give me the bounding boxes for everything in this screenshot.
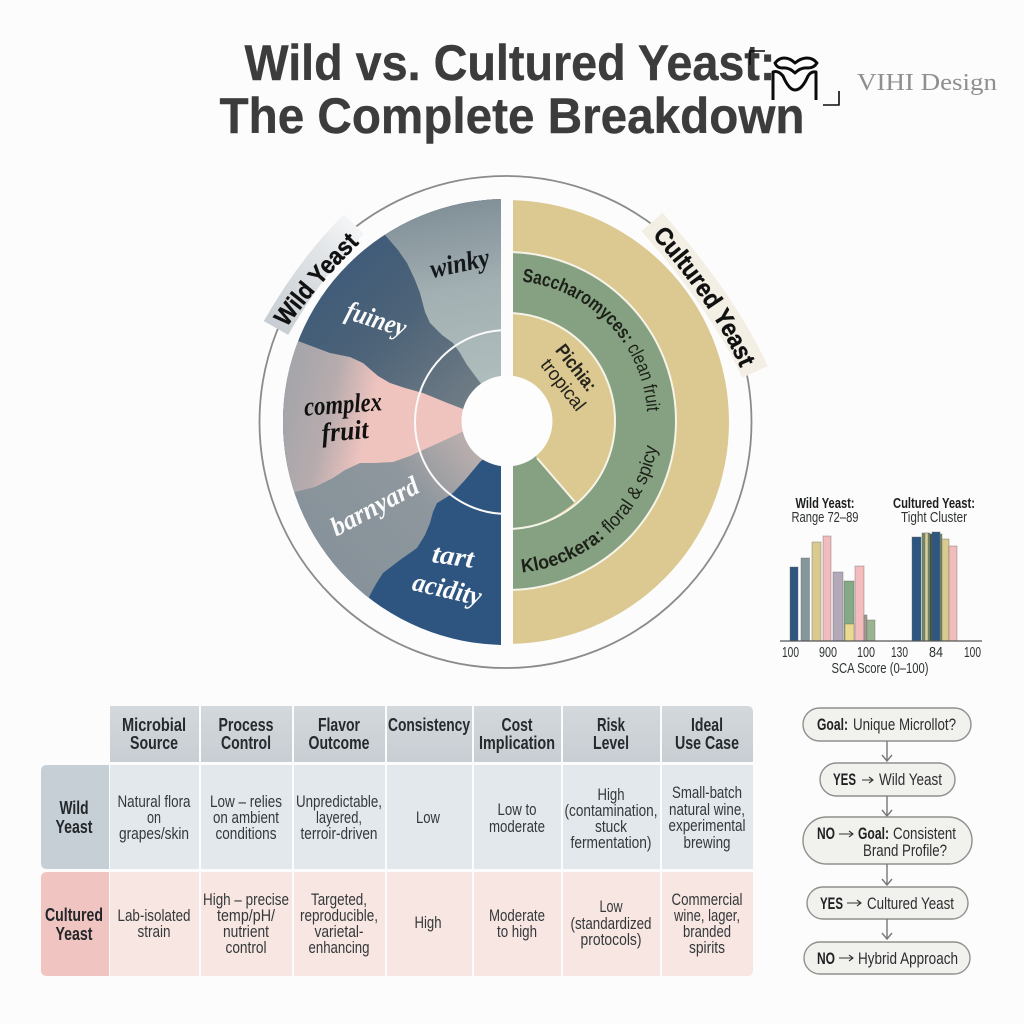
- cell: use case: spirits: [689, 939, 725, 957]
- title: The Complete Breakdown: [220, 88, 804, 144]
- segment: complex fruit: [283, 199, 496, 492]
- cell: flavor outcome: Targeted,: [311, 891, 367, 909]
- axis tick labels: [782, 645, 981, 661]
- chart heading: cultured yeast: [893, 496, 975, 526]
- chart heading: cultured yeast: Tight Cluster: [901, 510, 967, 526]
- cell: flavor outcome: terroir-driven: [300, 825, 378, 843]
- cell: process control: on ambient: [213, 809, 279, 827]
- flavor wheel: [258, 175, 768, 669]
- row head: Wild Yeast: Yeast: [56, 816, 92, 837]
- wheel label: Pichia tropical: tropical: [536, 355, 589, 415]
- flow node: yes cultured yeast: YES: [820, 894, 843, 913]
- header: Consistency: [387, 706, 472, 762]
- cell: use case: wine, lager,: [673, 907, 740, 925]
- flow node: unique microlot: Goal:: [817, 715, 848, 734]
- cell: risk: [563, 872, 660, 976]
- cell: microbial source: Natural flora: [118, 793, 191, 811]
- header: Cost Implication: Implication: [479, 732, 555, 753]
- cell: flavor outcome: layered,: [316, 809, 362, 827]
- row head: Cultured Yeast: [41, 872, 109, 976]
- axis tick labels: 100: [964, 645, 981, 661]
- wheel label: Kloeckera: Kloeckera: floral & spicy: [521, 445, 660, 572]
- table row: wild yeast: [41, 765, 753, 869]
- cell: use case: experimental: [668, 817, 746, 835]
- axis tick labels: 100: [782, 645, 799, 661]
- flow node: no hybrid approach: Hybrid Approach: [858, 949, 958, 968]
- row head: Wild Yeast: [41, 765, 109, 869]
- cell: risk: [563, 765, 660, 869]
- chart heading: cultured yeast: Cultured Yeast:: [893, 496, 975, 512]
- chart axis: [780, 640, 982, 642]
- cell: risk: fermentation): [570, 834, 652, 852]
- table row: cultured yeast: [41, 872, 753, 976]
- axis tick labels: 100: [857, 645, 875, 661]
- cell: cost: moderate: [489, 818, 545, 836]
- axis tick labels: 84: [929, 645, 943, 661]
- cell: microbial source: Lab-isolated: [118, 907, 190, 925]
- cell: process control: Low – relies: [210, 793, 282, 811]
- axis title: SCA Score (0–100): [832, 661, 928, 677]
- arrow: [882, 796, 892, 816]
- header: Microbial Source: Microbial: [122, 714, 186, 735]
- segment: winky: [385, 199, 501, 384]
- wheel label: complex fruit: [303, 386, 383, 448]
- cell: use case: Small-batch: [672, 784, 742, 802]
- header: Ideal Use Case: Ideal: [691, 714, 723, 735]
- arrow: [882, 919, 892, 939]
- bar chart: SCA score: [780, 496, 982, 677]
- inner ring line: [414, 329, 501, 515]
- panel: wild yeast half: [283, 199, 501, 645]
- header: Ideal Use Case: Use Case: [675, 732, 739, 753]
- header: Microbial Source: [110, 706, 199, 762]
- segment: inner tan: [513, 314, 614, 523]
- header: Process Control: [201, 706, 292, 762]
- title: [220, 35, 804, 144]
- header: Flavor Outcome: Outcome: [308, 732, 370, 753]
- flow node: no consistent brand profile: Consistent: [893, 824, 956, 843]
- cell: risk: (standardized: [570, 915, 652, 933]
- flow node: no hybrid approach: NO: [817, 949, 835, 968]
- flow node: no consistent brand profile: Goal:: [858, 824, 889, 843]
- axis tick labels: 130: [891, 645, 908, 661]
- segment: fuiney: [298, 199, 500, 409]
- cell: use case: branded: [683, 923, 731, 941]
- cultured yeast banner: Cultured Yeast: [655, 228, 754, 368]
- segment: inner green wedge: [513, 456, 575, 528]
- header: Flavor Outcome: [294, 706, 385, 762]
- wheel label: tart acidity: acidity: [410, 567, 486, 612]
- cell: process control: [201, 765, 292, 869]
- cell: microbial source: strain: [138, 923, 170, 941]
- cell: flavor outcome: enhancing: [308, 939, 370, 957]
- cell: consistency: [387, 872, 472, 976]
- segment: tart acidity: [283, 199, 501, 645]
- header: Flavor Outcome: Flavor: [318, 714, 360, 735]
- cell: risk: stuck: [595, 818, 628, 836]
- cell: consistency: Low: [416, 809, 440, 827]
- logo text: VIHI Design: [857, 70, 997, 96]
- logo: VIHI Design: [750, 51, 997, 105]
- flow node: yes wild yeast: YES: [833, 770, 856, 789]
- cell: use case: [662, 872, 753, 976]
- cell: consistency: High: [414, 914, 442, 932]
- chart heading: wild yeast: Range 72–89: [792, 510, 858, 526]
- wheel label: Saccharomyces: Saccharomyces: clean fruit: [523, 269, 660, 412]
- cell: microbial source: [110, 872, 199, 976]
- cell: microbial source: [110, 765, 199, 869]
- flow node: no consistent brand profile: NO: [817, 824, 835, 843]
- header: Consistency: Consistency: [388, 714, 471, 735]
- cell: use case: natural wine,: [669, 801, 745, 819]
- cell: microbial source: on: [147, 809, 161, 827]
- cell: flavor outcome: varietal-: [314, 923, 364, 941]
- arrow: [882, 864, 892, 885]
- flow node: yes cultured yeast: Cultured Yeast: [867, 894, 954, 913]
- cell: cost: Moderate: [489, 907, 545, 925]
- header: Process Control: Control: [221, 732, 271, 753]
- cell: cost: [474, 765, 561, 869]
- bars: cultured yeast: [912, 532, 957, 641]
- cell: flavor outcome: [294, 765, 385, 869]
- cell: flavor outcome: Unpredictable,: [296, 793, 382, 811]
- segment: outer tan ring: [513, 200, 729, 644]
- table header row: [110, 706, 753, 762]
- icon: logo mark: [750, 51, 839, 105]
- cell: risk: (contamination,: [564, 802, 658, 820]
- segment: green ring: [513, 251, 677, 591]
- wild yeast banner: Wild Yeast: [272, 233, 360, 325]
- wheel label: winky: winky: [427, 242, 493, 284]
- cell: use case: Commercial: [672, 891, 742, 909]
- row head: Cultured Yeast: Yeast: [56, 923, 92, 944]
- bars: wild yeast: [790, 536, 875, 641]
- header: Process Control: Process: [218, 714, 274, 735]
- cell: cost: to high: [497, 923, 537, 941]
- header: Cost Implication: Cost: [502, 714, 532, 735]
- decision flowchart: [803, 708, 972, 974]
- cell: process control: [201, 872, 292, 976]
- wheel label: barnyard: barnyard: [325, 470, 424, 542]
- wheel label: tart acidity: tart: [430, 538, 478, 574]
- header: Microbial Source: Source: [130, 732, 178, 753]
- axis tick labels: 900: [819, 645, 837, 661]
- wheel label: complex fruit: fruit: [320, 414, 371, 448]
- wheel label: fuiney: fuiney: [342, 295, 411, 343]
- header: Risk Level: [563, 706, 660, 762]
- cell: cost: Low to: [498, 801, 536, 819]
- outer ring: [260, 176, 752, 668]
- cell: process control: temp/pH/: [217, 907, 275, 925]
- cell: use case: brewing: [684, 834, 730, 852]
- flow node: unique microlot: Unique Microllot?: [853, 715, 956, 734]
- center hole: [462, 376, 552, 466]
- wheel label: complex fruit: complex: [303, 386, 383, 422]
- flow node: yes wild yeast: [820, 763, 955, 796]
- flow node: yes cultured yeast: [807, 887, 968, 919]
- cell: risk: High: [598, 786, 624, 804]
- header: Risk Level: Risk: [597, 714, 626, 735]
- comparison table: [41, 706, 753, 976]
- row head: Cultured Yeast: Cultured: [45, 904, 103, 925]
- cell: flavor outcome: [294, 872, 385, 976]
- header: Ideal Use Case: [662, 706, 753, 762]
- row head: Wild Yeast: Wild: [60, 797, 88, 818]
- cell: microbial source: grapes/skin: [119, 825, 189, 843]
- cell: process control: nutrient: [223, 923, 269, 941]
- cell: flavor outcome: reproducible,: [300, 907, 378, 925]
- flow node: unique microlot: [803, 708, 971, 741]
- cell: use case: [662, 765, 753, 869]
- flow node: no consistent brand profile: Brand Profile?: [863, 841, 947, 860]
- wheel label: Pichia tropical: Pichia:: [551, 341, 601, 396]
- flow node: no consistent brand profile: [803, 817, 972, 864]
- segment: barnyard: [283, 336, 483, 598]
- cell: process control: conditions: [216, 825, 276, 843]
- title: Wild vs. Cultured Yeast:: [244, 35, 776, 91]
- cell: cost: [474, 872, 561, 976]
- header: Risk Level: Level: [593, 732, 629, 753]
- flow node: yes wild yeast: Wild Yeast: [879, 770, 942, 789]
- arrow: [882, 741, 892, 761]
- cell: risk: protocols): [580, 931, 642, 949]
- cell: risk: Low: [600, 898, 623, 916]
- wheel label: Pichia tropical: [536, 341, 601, 415]
- chart heading: wild yeast: Wild Yeast:: [796, 496, 854, 512]
- cell: consistency: [387, 765, 472, 869]
- chart heading: wild yeast: [792, 496, 858, 526]
- header: Cost Implication: [474, 706, 561, 762]
- wheel label: tart acidity: [410, 538, 486, 612]
- cell: process control: High – precise: [203, 891, 289, 909]
- cell: process control: control: [226, 939, 266, 957]
- panel: cultured yeast half: [513, 200, 729, 644]
- flow node: no hybrid approach: [804, 942, 970, 974]
